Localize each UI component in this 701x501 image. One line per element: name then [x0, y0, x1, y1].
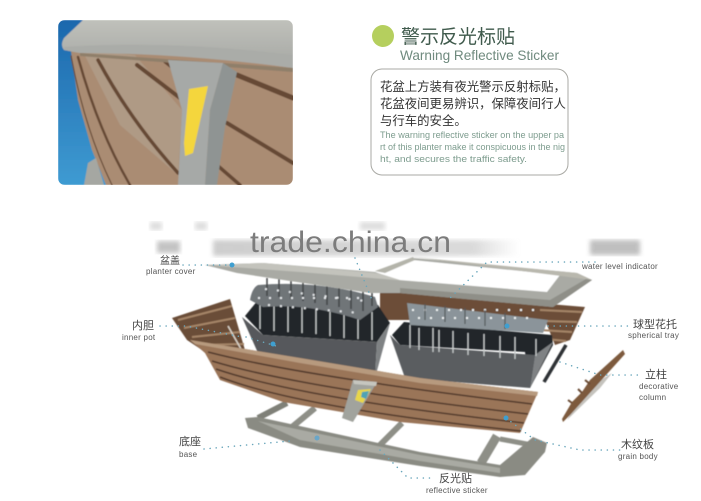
photo: wood slat grooves: [71, 56, 293, 185]
photo: planter cover edge: [61, 20, 293, 56]
label: decorative column: [639, 367, 679, 402]
label: base: [179, 434, 201, 459]
label: grain body: 木纹板: [621, 437, 654, 451]
label: reflective sticker: reflective sticker: [426, 486, 488, 495]
photo: reflective sticker close-up: [58, 20, 293, 185]
water indicator strip: [544, 345, 566, 382]
heading Chinese: 警示反光标贴: [401, 26, 515, 48]
label: decorative column: column: [639, 393, 666, 402]
back wood panel left: [172, 299, 245, 352]
right inner pot: [390, 322, 553, 388]
photo: yellow sticker: [184, 86, 208, 156]
base cross bars: [258, 403, 532, 463]
planter exploded diagram: [172, 257, 625, 477]
reflective sticker on column: [355, 389, 371, 403]
watermark text: trade.china.cn: [250, 226, 451, 259]
left spherical tray: [250, 278, 378, 320]
label: inner pot: inner pot: [122, 333, 156, 342]
label: decorative column: decorative: [639, 382, 679, 391]
label: spherical tray: [628, 317, 679, 340]
left inner pot: [242, 300, 390, 378]
label: grain body: grain body: [618, 452, 658, 461]
label: base: base: [179, 450, 198, 459]
photo: base foot: [84, 158, 104, 185]
base: [245, 403, 547, 477]
photo: column side: [205, 63, 237, 185]
description Chinese: [380, 79, 566, 128]
label: inner pot: 内胆: [132, 318, 154, 332]
photo: column front: [168, 60, 223, 185]
label: base: 底座: [179, 434, 201, 448]
label: inner pot: [122, 318, 156, 342]
label: planter cover: 盆盖: [160, 254, 180, 267]
label: reflective sticker: 反光贴: [439, 471, 472, 485]
watermark band: [150, 222, 640, 256]
front wood grain body: [190, 340, 538, 433]
back wood panel right: [380, 290, 585, 345]
detached decorative column: [562, 350, 625, 422]
heading bullet: [372, 25, 394, 47]
right spherical tray: [407, 303, 548, 333]
description English: ht, and secures the traffic safety.: [380, 153, 527, 164]
heading English: Warning Reflective Sticker: [400, 47, 559, 63]
description English: rt of this planter make it conspicuous in the nig: [380, 141, 565, 152]
label: planter cover: [146, 254, 196, 276]
description box: [371, 69, 568, 175]
label: grain body: [618, 437, 658, 461]
label: spherical tray: 球型花托: [633, 317, 677, 331]
description Chinese: 花盆夜间更易辨识，保障夜间行人: [380, 96, 566, 111]
planter cover: [205, 257, 592, 307]
label: spherical tray: spherical tray: [628, 331, 679, 340]
label: water level indicator: water level indicator: [581, 262, 658, 271]
description English: [380, 129, 565, 164]
label: planter cover: planter cover: [146, 267, 196, 276]
description English: The warning reflective sticker on the upper pa: [380, 129, 565, 140]
label: reflective sticker: [426, 471, 488, 495]
description Chinese: 与行车的安全。: [380, 113, 467, 128]
front decorative column: [342, 380, 377, 422]
description Chinese: 花盆上方装有夜光警示反射标贴，: [380, 79, 566, 94]
label: decorative column: 立柱: [645, 367, 667, 381]
leader dotted lines: [160, 258, 640, 478]
